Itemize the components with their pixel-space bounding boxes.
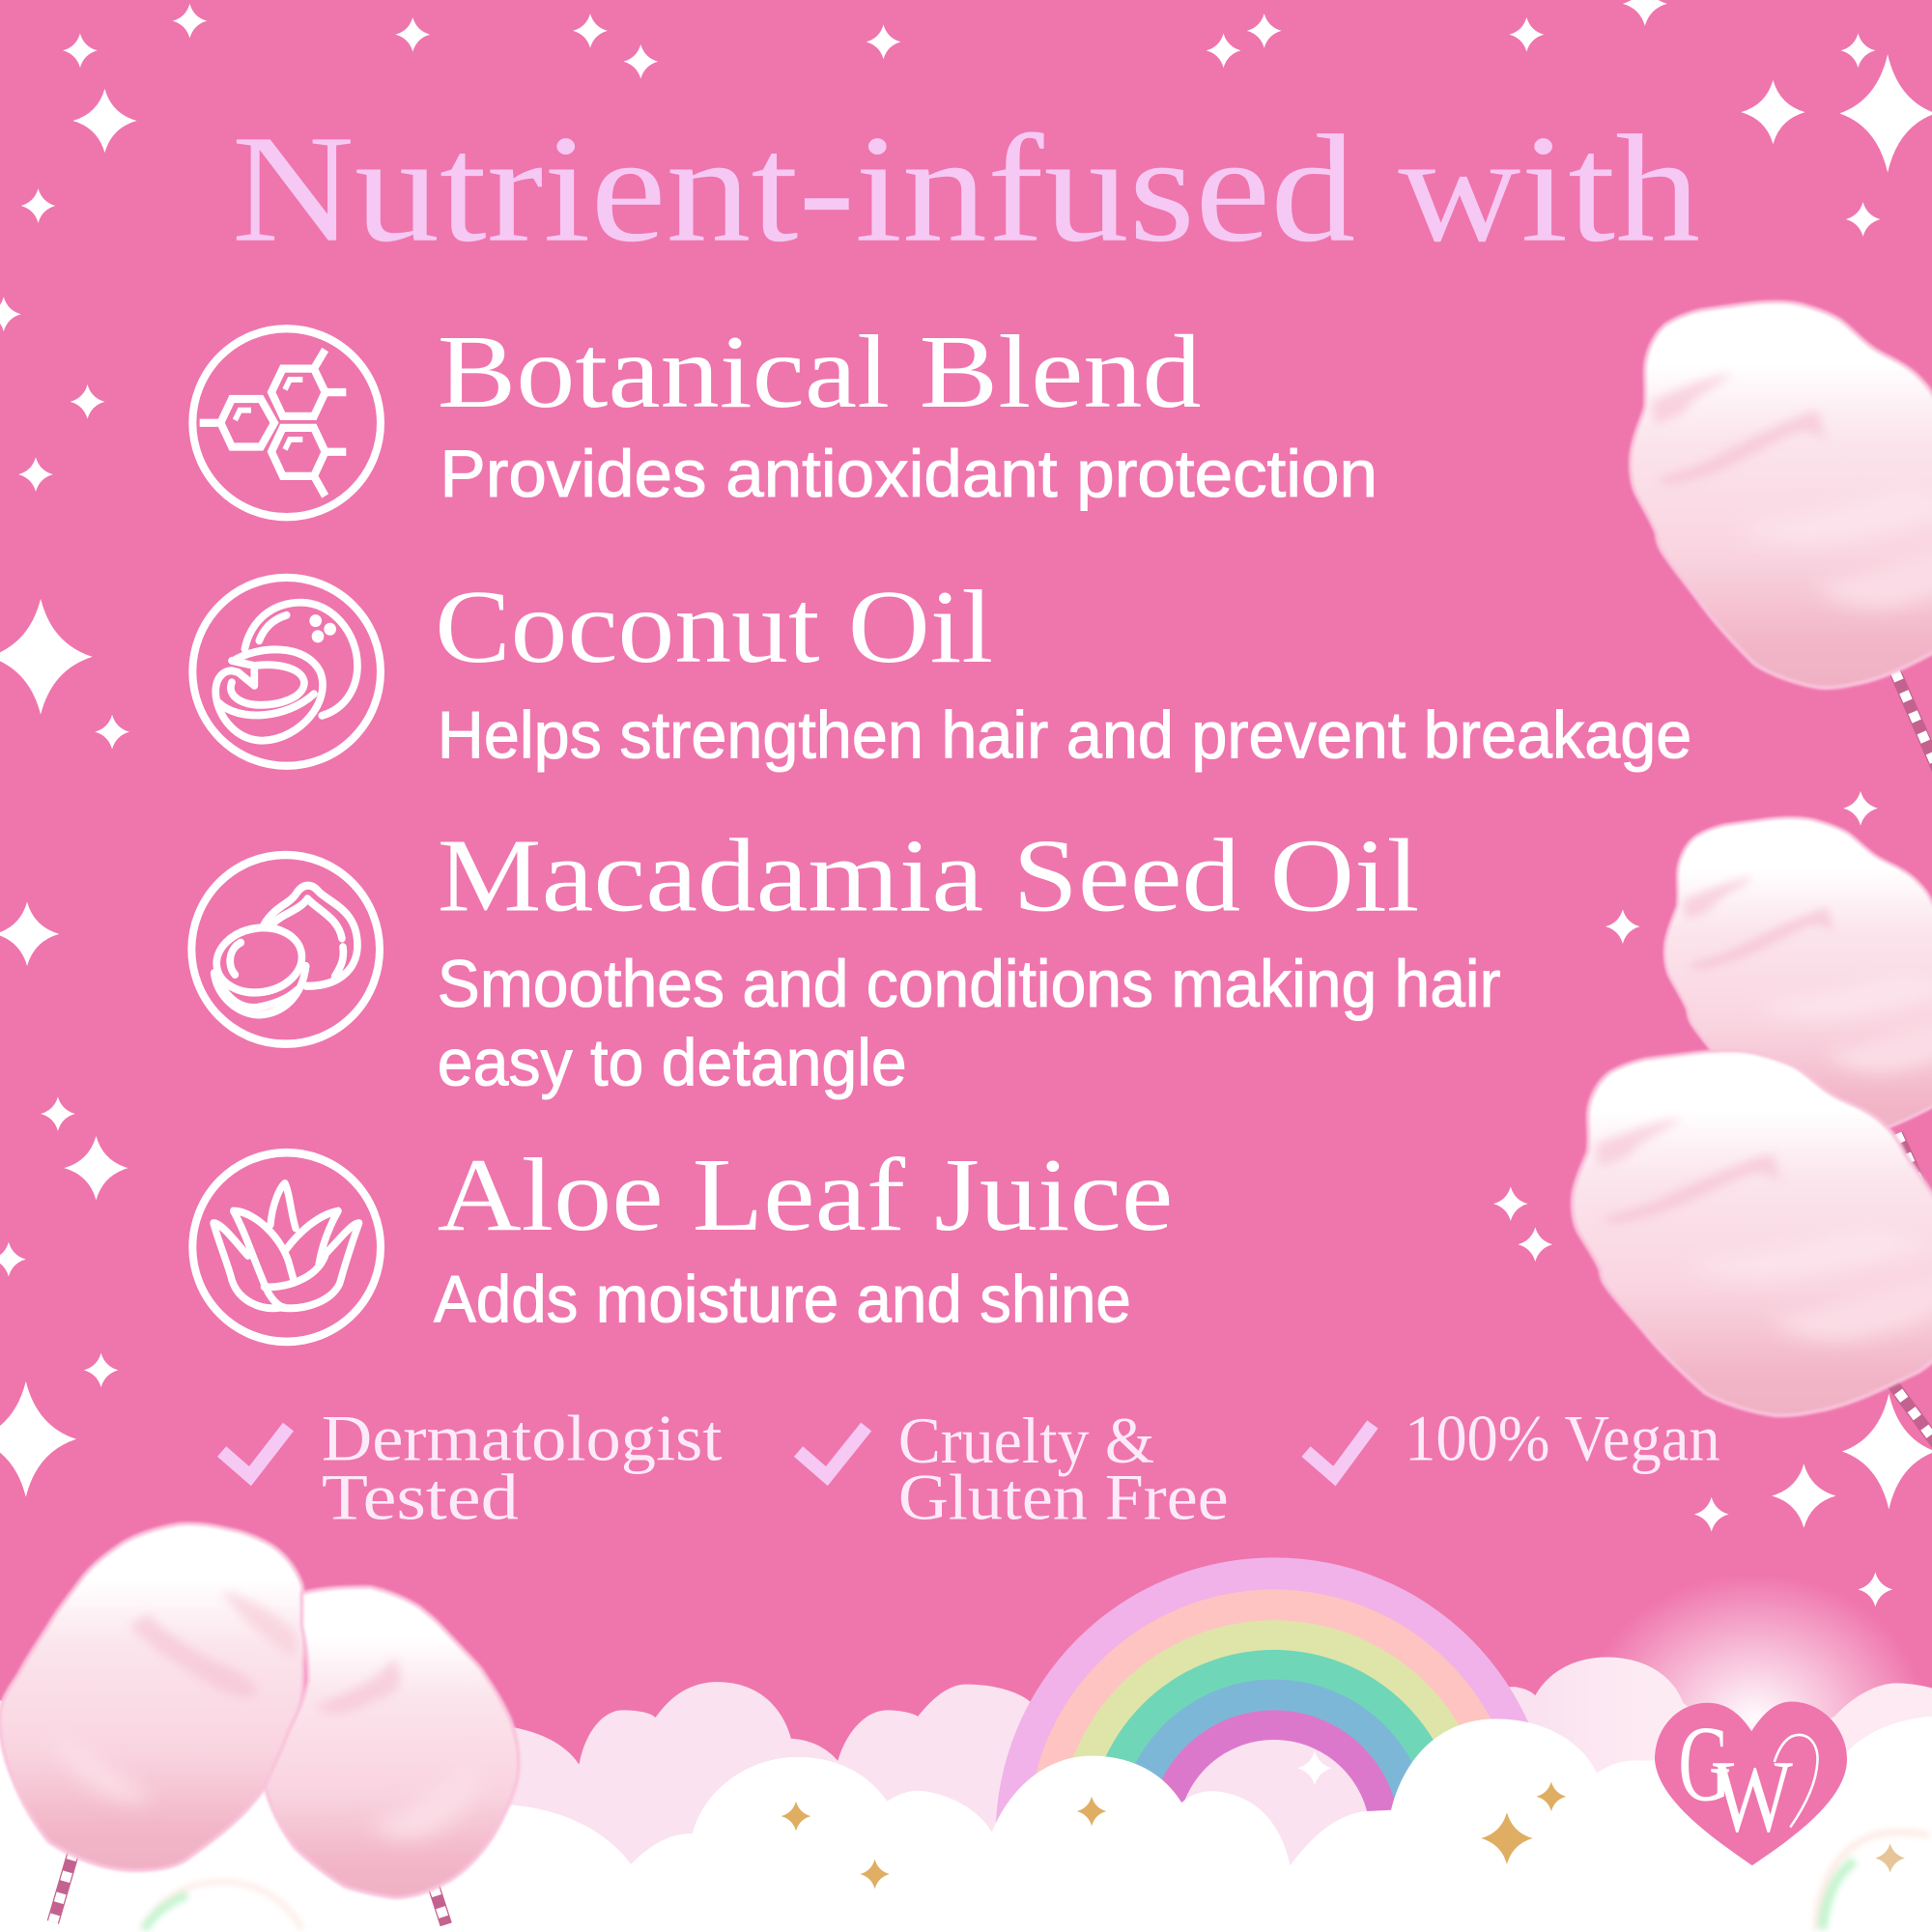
heading: Macadamia Seed Oil <box>438 818 1419 934</box>
label: 100% Vegan <box>1405 1402 1720 1474</box>
icon: check mark <box>222 1427 288 1476</box>
gold stars <box>781 1781 1905 1889</box>
description: Provides antioxidant protection <box>440 437 1378 511</box>
ingredient: aloe leaf juice <box>192 1137 1173 1342</box>
label line 2: Tested <box>322 1462 519 1534</box>
description: Smoothes and conditions making hair <box>438 947 1501 1021</box>
heading: Aloe Leaf Juice <box>438 1137 1173 1253</box>
logo heart <box>1655 1701 1847 1865</box>
glow behind logo <box>1582 1574 1927 1864</box>
icon: molecule <box>192 328 381 517</box>
icon: check mark <box>1306 1424 1373 1476</box>
description: Adds moisture and shine <box>434 1263 1131 1337</box>
label line 2: Gluten Free <box>898 1462 1229 1534</box>
claim: vegan <box>1306 1402 1720 1476</box>
icon: coconut <box>192 578 381 766</box>
description line 2: easy to detangle <box>438 1026 907 1100</box>
cotton candy: lower right <box>1573 1051 1932 1444</box>
logo monogram: G <box>1678 1705 1731 1825</box>
title: Nutrient-infused with <box>232 104 1700 274</box>
label: Cruelty & <box>898 1405 1154 1477</box>
label: Dermatologist <box>322 1402 723 1474</box>
back cloud layer <box>499 1658 1932 1932</box>
rainbow <box>996 1557 1552 1873</box>
description: Helps strengthen hair and prevent breakage <box>438 697 1691 772</box>
cotton candy: bottom centre-left <box>265 1587 519 1924</box>
front white cloud layer <box>0 1700 1932 1932</box>
ingredient: coconut oil <box>192 569 1691 772</box>
bubble right <box>1816 1833 1929 1929</box>
cotton candy: bottom left <box>0 1523 305 1922</box>
heading: Botanical Blend <box>438 314 1202 430</box>
star inside rainbow <box>1297 1750 1332 1785</box>
logo monogram: W <box>1713 1740 1793 1854</box>
icon: check mark <box>799 1427 867 1476</box>
heading: Coconut Oil <box>435 569 993 685</box>
ingredient: botanical blend <box>192 314 1378 517</box>
icon: aloe plant <box>192 1152 381 1342</box>
bubble left <box>142 1882 301 1929</box>
icon: macadamia nut <box>191 855 380 1044</box>
logo monogram <box>1678 1705 1818 1854</box>
ingredient: macadamia seed oil <box>191 818 1501 1100</box>
cotton candy: middle right <box>1664 818 1932 1213</box>
claim: cruelty and gluten free <box>799 1405 1229 1534</box>
claim: dermatologist tested <box>222 1402 723 1534</box>
cotton candy: top right <box>1631 301 1932 777</box>
